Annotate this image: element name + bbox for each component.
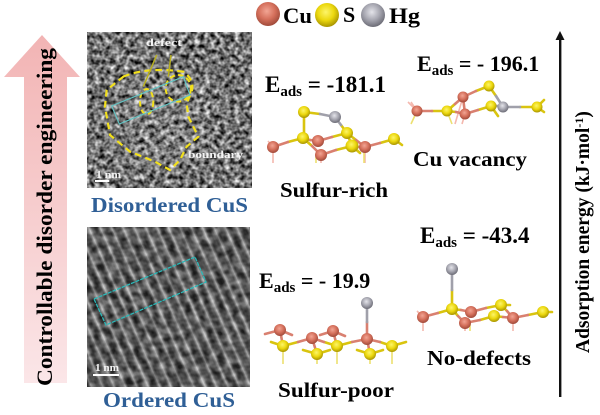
energy: no-defects: E <box>420 223 435 248</box>
label: boundary: boundary <box>188 149 244 161</box>
energy: Cu vacancy: ads <box>432 63 454 79</box>
micrograph: disordered CuS <box>87 32 252 188</box>
legend: S <box>343 2 355 27</box>
caption: ordered CuS: Ordered CuS <box>103 388 235 412</box>
overlays in zoomed coordinates <box>95 55 198 182</box>
name: sulfur-poor: Sulfur-poor <box>278 378 394 402</box>
label: scale bar: 1 nm <box>96 170 122 181</box>
molecule: sulfur-poor <box>265 297 406 364</box>
name: no-defects: No-defects <box>427 346 531 370</box>
name: Cu vacancy: Cu vacancy <box>413 147 528 171</box>
axis arrow: adsorption energy <box>556 31 564 397</box>
energy: sulfur-rich: ads <box>280 84 302 100</box>
energy: Cu vacancy: E <box>417 51 432 76</box>
molecule: Cu vacancy <box>408 80 544 124</box>
label: defect: defect <box>146 37 182 49</box>
legend: Hg <box>389 3 420 28</box>
energy: sulfur-poor: ads <box>274 280 296 296</box>
legend: Cu <box>283 3 312 28</box>
energy: sulfur-rich: = -181.1 <box>302 72 386 97</box>
micrograph: ordered CuS <box>87 227 250 387</box>
legend <box>256 2 420 28</box>
energy: sulfur-poor: E <box>259 268 274 293</box>
molecule: sulfur-rich <box>267 106 402 163</box>
axis label: ) <box>573 111 594 118</box>
name: sulfur-rich: Sulfur-rich <box>280 178 388 202</box>
label: scale bar: 1 nm <box>95 363 120 374</box>
axis label: -1 <box>572 118 586 128</box>
energy: sulfur-poor: = - 19.9 <box>295 268 370 293</box>
energy: no-defects: ads <box>435 235 457 251</box>
arrow: controllable disorder engineering <box>4 35 80 386</box>
axis label: Adsorption energy (kJ·mol <box>573 128 594 353</box>
energy: Cu vacancy: = - 196.1 <box>453 51 539 76</box>
molecule: no-defects <box>417 263 552 331</box>
arrow label: Controllable disorder engineering <box>32 48 57 386</box>
energy: sulfur-rich: E <box>265 72 280 97</box>
energy: no-defects: = -43.4 <box>457 223 530 248</box>
caption: disordered CuS: Disordered CuS <box>91 193 248 217</box>
